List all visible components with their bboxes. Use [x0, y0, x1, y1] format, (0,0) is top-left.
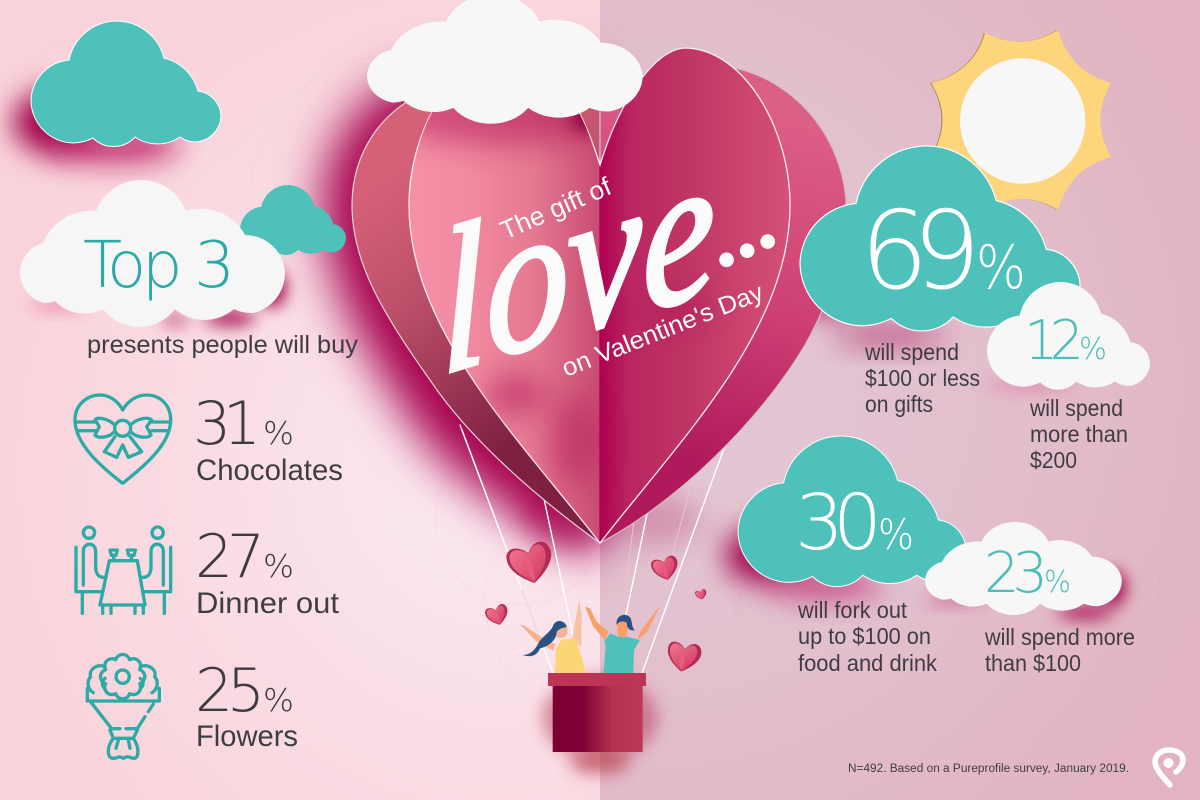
heading: top 3: Top 3	[83, 229, 235, 303]
stat: 30%: %	[878, 510, 914, 559]
background: right panel	[600, 0, 1200, 800]
balloon strings	[460, 425, 727, 673]
heart large left	[504, 540, 557, 588]
stat: 25%: %	[263, 683, 294, 719]
person: girl	[520, 600, 586, 673]
title line: the gift of: The gift of	[495, 171, 616, 246]
cloud: white top	[367, 0, 643, 124]
icon: dinner for two	[76, 527, 171, 613]
stat: 30%: 30	[795, 479, 882, 568]
person: boy	[585, 606, 660, 673]
basket body	[553, 686, 643, 752]
caption: 23%: than $100	[985, 650, 1081, 676]
cloud: 30%	[738, 436, 966, 587]
stat: 23%: 23	[984, 541, 1048, 606]
title: love	[436, 107, 789, 419]
balloon centre panel	[409, 48, 790, 543]
stat: 31%: %	[263, 416, 294, 452]
icon: flower bouquet	[87, 655, 159, 758]
caption: 69%: on gifts	[865, 391, 933, 417]
subheading: presents people will buy	[87, 331, 359, 359]
balloon left back panel	[352, 95, 600, 543]
heart small left	[484, 603, 511, 628]
logo: pin	[1155, 750, 1183, 785]
label: dinner out: Dinner out	[196, 587, 340, 620]
caption: 69%: $100 or less	[865, 365, 980, 391]
people in basket	[520, 600, 660, 673]
stat: 23%: %	[1044, 565, 1071, 600]
footnote: N=492. Based on a Pureprofile survey, January 2019.	[848, 763, 1129, 775]
basket	[548, 673, 646, 752]
caption: 12%: $200	[1030, 447, 1077, 473]
cloud: top 3	[20, 180, 285, 327]
title ellipsis: ...	[687, 170, 789, 288]
background: left panel	[0, 0, 600, 800]
title line: on Valentine's Day: on Valentine's Day	[558, 278, 768, 383]
stat: 69%: 69	[860, 189, 981, 314]
heart right	[650, 554, 681, 583]
cloud shadows and balloon glow	[13, 75, 1126, 620]
title word: love: love	[436, 107, 719, 419]
basket rim	[548, 673, 646, 686]
stat: 27%: %	[263, 549, 294, 585]
cloud: 12%	[987, 282, 1150, 390]
cloud: 23%	[925, 522, 1122, 615]
stat: 27%: 27	[195, 522, 265, 592]
heart lower right	[664, 640, 703, 674]
cloud: 69%	[800, 146, 1080, 331]
panel: spend on food	[738, 436, 1135, 676]
stat: 69%: %	[976, 233, 1026, 303]
cloud: teal top left	[31, 21, 221, 147]
caption: 23%: will spend more	[984, 624, 1135, 650]
balloon: heart	[352, 48, 846, 543]
cloud: small teal	[240, 185, 346, 255]
label: chocolates: Chocolates	[196, 454, 343, 487]
stat: 31%: 31	[193, 389, 261, 459]
caption: 12%: will spend	[1029, 395, 1123, 421]
panel: top 3 presents	[20, 180, 359, 758]
caption: 69%: will spend	[864, 339, 959, 365]
sun	[930, 30, 1111, 210]
basket shadow	[542, 676, 658, 774]
stat: 12%: 12	[1024, 309, 1084, 372]
caption: 30%: will fork out	[797, 597, 907, 623]
caption: 30%: food and drink	[798, 650, 937, 676]
icon: heart chocolate box	[75, 395, 171, 483]
caption: 12%: more than	[1030, 421, 1128, 447]
balloon right back panel	[600, 68, 846, 543]
heart tiny	[695, 589, 708, 601]
stat: 12%: %	[1079, 332, 1107, 367]
stat: 25%: 25	[195, 656, 265, 726]
label: flowers: Flowers	[196, 720, 298, 753]
caption: 30%: up to $100 on	[798, 623, 931, 649]
paper hearts	[484, 540, 708, 674]
panel: spend on gifts	[800, 146, 1150, 473]
balloon inner shading	[390, 85, 713, 485]
